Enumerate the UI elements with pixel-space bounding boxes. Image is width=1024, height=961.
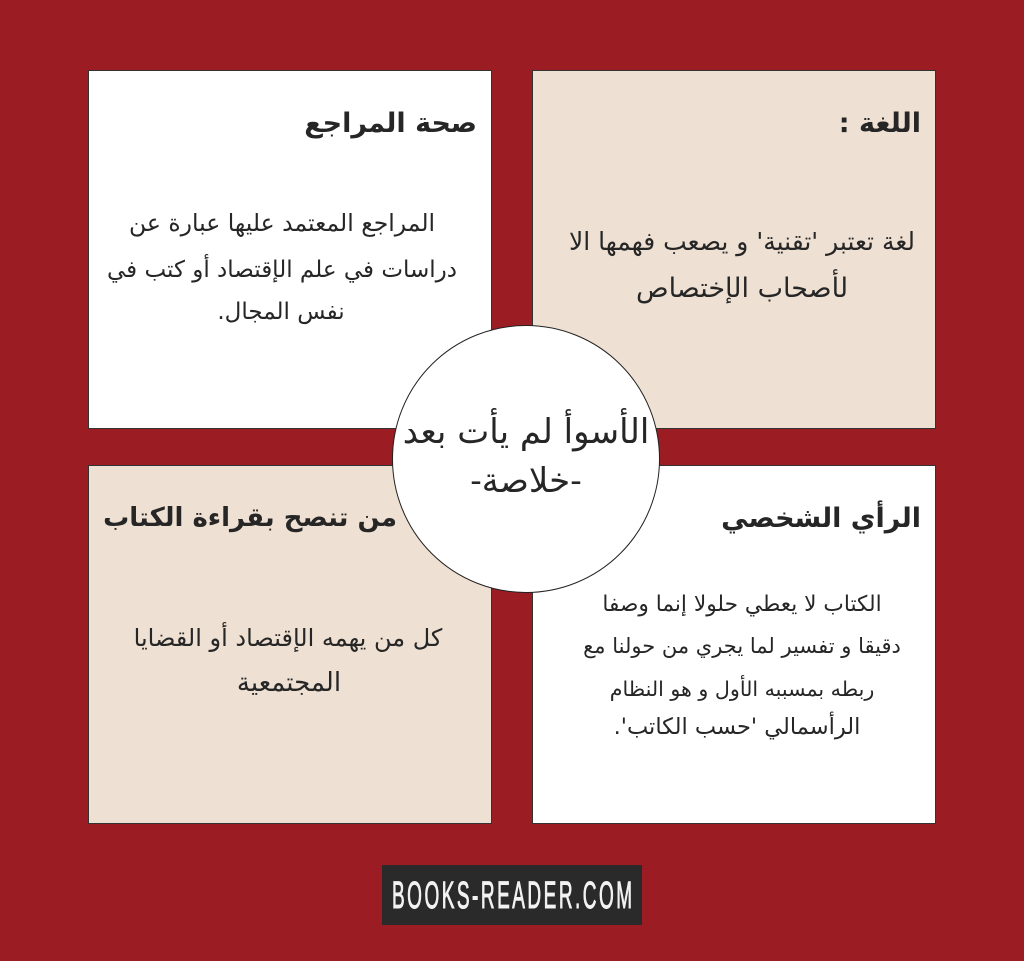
text: language: لأصحاب الإختصاص: [636, 273, 848, 304]
text: language: [569, 227, 915, 304]
text: opinion: دقيقا و تفسير لما يجري من حولنا مع: [583, 634, 901, 658]
heading: sources: صحة المراجع: [304, 108, 477, 139]
text: opinion: الكتاب لا يعطي حلولا إنما وصفا: [602, 592, 882, 617]
center title: -خلاصة-: [470, 461, 582, 501]
heading: opinion: الرأي الشخصي: [721, 503, 921, 534]
text: audience: كل من يهمه الإقتصاد أو القضايا: [134, 624, 442, 652]
text: audience: المجتمعية: [237, 668, 341, 698]
text: sources: [107, 209, 457, 325]
text: sources: المراجع المعتمد عليها عبارة عن: [129, 209, 435, 237]
center circle: [392, 325, 660, 593]
text: sources: دراسات في علم الإقتصاد أو كتب في: [107, 257, 457, 283]
text: language: لغة تعتبر 'تقنية' و يصعب فهمها الا: [569, 227, 915, 256]
heading: language: اللغة :: [839, 108, 921, 139]
text: opinion: ربطه بمسببه الأول و هو النظام: [610, 677, 874, 701]
text: sources: نفس المجال.: [217, 299, 345, 325]
footer badge: [382, 865, 642, 925]
text: opinion: [583, 592, 901, 740]
panel: language: [532, 70, 936, 429]
panel: audience: [88, 465, 492, 824]
panel: sources: [88, 70, 492, 429]
footer badge: BOOKS-READER.COM: [392, 875, 635, 917]
panel: opinion: [532, 465, 936, 824]
heading: audience: من تنصح بقراءة الكتاب: [103, 503, 397, 533]
center title: [403, 408, 649, 501]
text: opinion: الرأسمالي 'حسب الكاتب'.: [614, 714, 860, 740]
center title: الأسوأ لم يأت بعد: [403, 412, 649, 452]
text: audience: [134, 622, 442, 698]
